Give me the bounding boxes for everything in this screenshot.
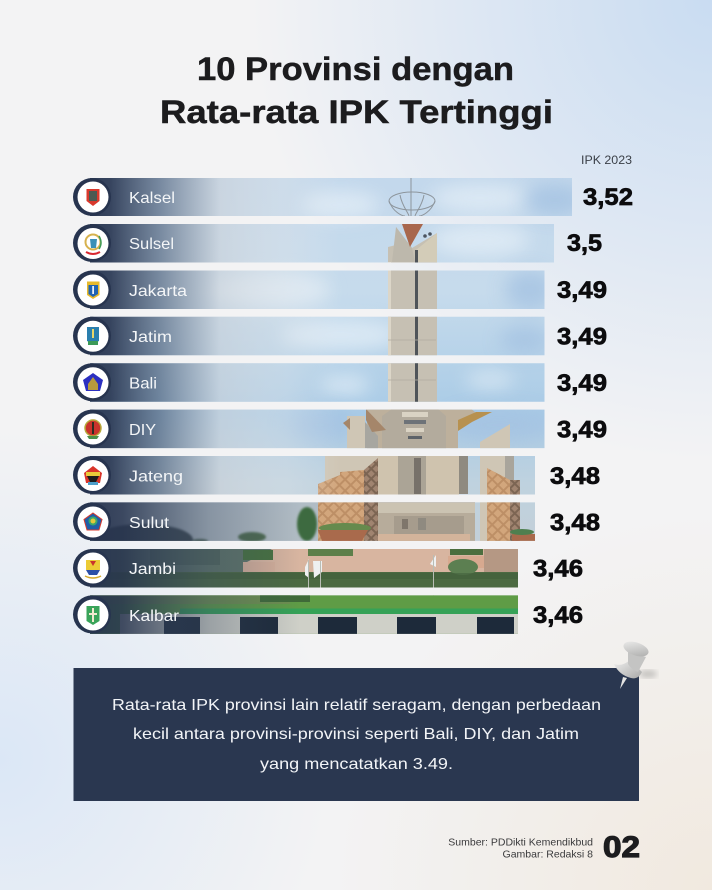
- province badge: Sulut: [73, 502, 111, 540]
- label: DIY: DIY: [129, 422, 156, 439]
- callout text: kecil antara provinsi-provinsi seperti Bali, DIY, dan Jatim: [133, 726, 579, 743]
- icon: push pin: [614, 639, 657, 689]
- label: Jambi: Jambi: [129, 561, 176, 578]
- value: Jambi: 3,46: [533, 556, 583, 582]
- value: Jatim: 3,49: [557, 324, 607, 350]
- row: Jatim: [73, 317, 607, 355]
- callout text: yang mencatatkan 3.49.: [260, 756, 453, 773]
- value: Jakarta: 3,49: [557, 277, 607, 304]
- source credits: Sumber: PDDikti Kemendikbud: [448, 836, 593, 848]
- dark gradient overlay: [90, 178, 330, 494]
- label: Sulut: Sulut: [129, 515, 170, 532]
- row: Sulsel: [73, 224, 602, 262]
- value: Kalsel: 3,52: [583, 184, 633, 211]
- side pillars: [347, 416, 365, 450]
- province badge: Bali: [73, 363, 111, 401]
- label: Kalbar: Kalbar: [129, 608, 180, 625]
- lattice walls: [318, 475, 340, 541]
- value: Jateng: 3,48: [550, 463, 600, 490]
- label: Sulsel: Sulsel: [129, 236, 174, 253]
- province badge: Jakarta: [73, 270, 111, 308]
- value: Kalbar: 3,46: [533, 602, 583, 629]
- province badge: Jatim: [73, 317, 111, 355]
- title: 10 Provinsi dengan: [197, 51, 514, 87]
- callout panel: [74, 668, 639, 801]
- callout text: Rata-rata IPK provinsi lain relatif seragam, dengan perbedaan: [112, 697, 601, 714]
- value: Sulut: 3,48: [550, 510, 600, 536]
- title: Rata-rata IPK Tertinggi: [160, 94, 553, 130]
- label: Jateng: Jateng: [129, 468, 183, 486]
- lower wall: [100, 549, 272, 572]
- flags: [313, 561, 322, 578]
- canopy and entrance: [378, 502, 475, 542]
- province badge: Kalbar: [73, 595, 111, 633]
- row: Jateng: [73, 456, 600, 494]
- label: Jakarta: Jakarta: [129, 283, 187, 300]
- province badge: Jambi: [73, 549, 111, 587]
- row: Jambi: [73, 549, 583, 587]
- label: Kalsel: Kalsel: [129, 190, 175, 207]
- row: Kalsel: [73, 178, 633, 216]
- value: Bali: 3,49: [557, 370, 607, 397]
- province badge: Sulsel: [73, 224, 111, 262]
- source credits: Gambar: Redaksi 8: [503, 848, 593, 860]
- province badge: DIY: [73, 410, 111, 448]
- bar chart: photo of monument clipped to bars: [73, 178, 585, 638]
- distant trees: [92, 506, 319, 541]
- callout text: [112, 697, 601, 773]
- province badge: Jateng: [73, 456, 111, 494]
- hazy horizon: [100, 502, 330, 541]
- value: Sulsel: 3,5: [567, 230, 602, 257]
- row: Kalbar: [73, 595, 583, 633]
- wire dish and mast: [389, 178, 435, 216]
- row: Sulut: [73, 502, 600, 540]
- label: Jatim: Jatim: [129, 329, 172, 346]
- source credits: [448, 836, 593, 860]
- column label: IPK 2023: IPK 2023: [581, 155, 632, 167]
- row: Jakarta: [73, 270, 607, 308]
- row: DIY: [73, 410, 607, 448]
- row: Bali: [73, 363, 607, 401]
- tower: [388, 227, 437, 420]
- page number: 02: [603, 831, 640, 864]
- province badge: Kalsel: [73, 178, 111, 216]
- label: Bali: Bali: [129, 376, 157, 392]
- title: [160, 51, 553, 130]
- central building: [367, 410, 458, 448]
- planters: [319, 523, 371, 530]
- grass and road barrier: [90, 595, 518, 635]
- value: DIY: 3,49: [557, 416, 607, 444]
